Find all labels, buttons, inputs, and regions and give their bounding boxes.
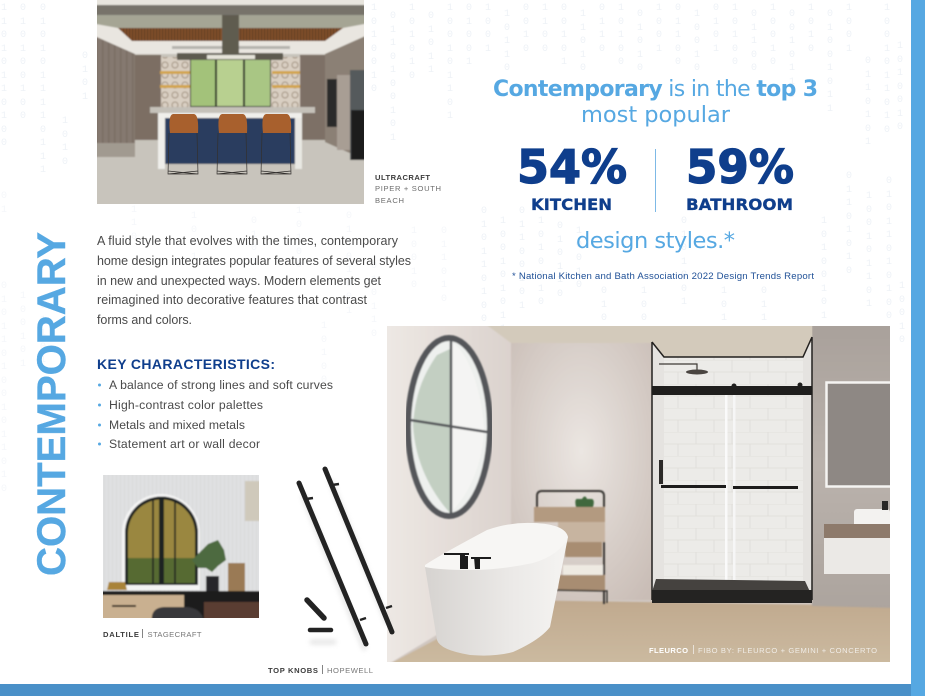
caption: Top Knobs: TOP KNOBS — [268, 666, 318, 675]
text: 00101 — [561, 3, 567, 68]
text: 0101 — [601, 286, 607, 338]
list: key characteristics: A balance of strong lines and soft curves — [109, 378, 333, 392]
caption: Fleurco: FLEURCO — [649, 646, 688, 655]
photo: Daltile Stagecraft — [103, 475, 259, 618]
list: key characteristics: High-contrast color palettes — [109, 398, 263, 412]
footnote: * National Kitchen and Bath Association 2022 Design Trends Report — [512, 271, 814, 282]
text: 01001011 — [827, 9, 833, 114]
caption: Top Knobs — [268, 665, 373, 675]
text: 10100 — [321, 321, 327, 386]
text: 1010010 — [897, 41, 903, 133]
text: 01101010 — [846, 171, 852, 276]
text: 1001 — [641, 286, 647, 338]
text: 100101 — [20, 291, 26, 370]
text: 01100 — [675, 3, 681, 68]
text: 1001011010 — [884, 3, 890, 136]
background: binary code columns — [1, 3, 905, 494]
text: 01001 — [466, 3, 472, 68]
text: 1001 — [485, 3, 491, 54]
storage rack — [534, 491, 607, 604]
text: 0101 — [82, 51, 88, 102]
text: 0110 — [599, 3, 605, 54]
text: 1010 — [721, 286, 727, 338]
heading: key characteristics: KEY CHARACTERISTICS: — [97, 356, 275, 372]
text: 10010 — [770, 3, 776, 68]
text: 011010 — [441, 226, 447, 304]
bottom blue bar — [0, 684, 911, 696]
text: 01101001 — [346, 211, 352, 316]
text: 01100101 — [519, 206, 525, 312]
text: 01010 — [637, 9, 643, 74]
text: 1001 — [846, 3, 852, 54]
headline: top 3 styles — [493, 77, 818, 128]
body paragraph: reimagined into decorative features that contrast — [97, 293, 368, 307]
text: 10010 — [694, 9, 700, 74]
bar stools — [168, 114, 291, 174]
right blue bar — [911, 0, 925, 696]
text: 1100 — [542, 3, 548, 54]
text: 10100101 — [821, 216, 827, 322]
text: 100101101 — [866, 191, 872, 310]
text: 11010 — [580, 9, 586, 74]
stat: bathroom 59%: 59% — [686, 140, 794, 194]
body paragraph: in new and unexpected ways. Modern elements get — [97, 274, 382, 288]
text: 1010010 — [538, 216, 544, 308]
text: 0101011110111 — [40, 3, 46, 176]
photo: bathroom — [380, 320, 896, 668]
photo: Ultracraft kitchen — [90, 0, 370, 210]
text: 100101101 — [447, 3, 453, 122]
list: key characteristics: Metals and mixed metals — [109, 418, 245, 432]
body paragraph — [97, 234, 411, 327]
text: 0101101001 — [481, 206, 487, 338]
text: 10100 — [618, 3, 624, 68]
text: 0010 — [523, 3, 529, 54]
stat: kitchen 54%: 54% — [517, 140, 627, 194]
text: 010110 — [557, 221, 563, 300]
caption: Daltile: STAGECRAFT — [148, 630, 202, 639]
text: 010110 — [371, 261, 377, 340]
product: Top Knobs pulls — [299, 469, 392, 650]
text: 0110101 — [865, 56, 871, 148]
text: 1010010 — [371, 3, 377, 95]
text: 1001 — [656, 3, 662, 54]
text: 10010 — [576, 226, 582, 291]
stat divider — [655, 149, 656, 212]
text: 0101001 — [681, 216, 687, 308]
text: 010100100 — [20, 3, 26, 122]
caption: Fleurco: FIBO BY: FLEURCO + GEMINI + CONCERTO — [698, 646, 877, 655]
text: 0110 — [761, 286, 767, 338]
list: key characteristics: Statement art or wall decor — [109, 437, 260, 451]
caption: Ultracraft: PIPER + SOUTH — [375, 184, 441, 193]
text: 11010110100 — [1, 3, 7, 149]
text: 1010 — [62, 116, 68, 168]
bathtub — [425, 523, 568, 656]
text: 01 — [1, 191, 7, 216]
text: 10110 — [504, 9, 510, 74]
text: 10100 — [296, 206, 302, 271]
text: 0110100101 — [390, 11, 396, 144]
text: 10100 — [732, 3, 738, 68]
text: 100101011 — [500, 216, 506, 335]
text: 01101 — [40, 301, 46, 366]
caption: Ultracraft: BEACH — [375, 196, 404, 205]
text: 1001 — [191, 211, 197, 262]
list: key characteristics — [98, 378, 333, 451]
text: design styles: design styles.* — [576, 228, 735, 254]
text: 0010110 — [789, 9, 795, 101]
oval window — [408, 338, 490, 516]
stat: bathroom 59%: BATHROOM — [686, 195, 793, 214]
text: 0101 — [251, 216, 257, 268]
text: 1010 — [808, 3, 814, 54]
text: 10010 — [899, 281, 905, 346]
wall mirror — [826, 382, 892, 486]
text: 01011010100 — [886, 176, 892, 322]
text: 01011 — [428, 11, 434, 76]
body paragraph: forms and colors. — [97, 313, 192, 327]
text: 10010 — [411, 226, 417, 291]
caption: Top Knobs: HOPEWELL — [327, 666, 373, 675]
stat: kitchen 54%: KITCHEN — [531, 195, 612, 214]
text: 0101 — [713, 3, 719, 54]
vanity — [824, 501, 890, 574]
headline: top 3 styles: most popular — [581, 102, 731, 128]
caption: Daltile: DALTILE — [103, 630, 139, 639]
caption: Ultracraft: ULTRACRAFT — [375, 173, 430, 182]
caption: Daltile — [103, 629, 202, 639]
headline: top 3 styles: Contemporary is in the top 3 — [493, 77, 818, 102]
vertical title: CONTEMPORARY — [30, 232, 74, 576]
text: 0110 — [131, 191, 137, 242]
body paragraph: A fluid style that evolves with the times, contemporary — [97, 234, 399, 248]
body paragraph: home design integrates popular features of several styles — [97, 254, 411, 268]
shower enclosure — [652, 326, 812, 603]
text: 01100 — [751, 9, 757, 74]
text: 0101101001011010 — [1, 281, 7, 494]
caption: Ultracraft — [375, 173, 441, 205]
text: 101010 — [409, 3, 415, 82]
